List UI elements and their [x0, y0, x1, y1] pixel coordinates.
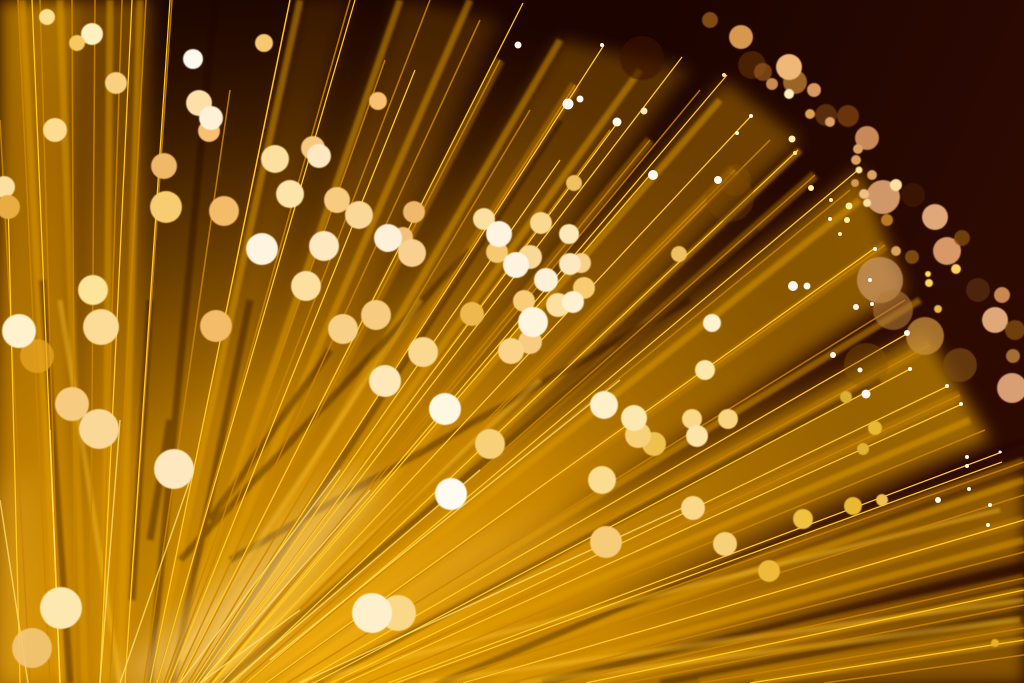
bokeh lights: large left and centre	[0, 9, 505, 668]
tiny white fibre tips	[514, 42, 1002, 527]
bokeh lights: upper right arc	[620, 12, 1024, 403]
cream fibre bundle near the base	[0, 480, 600, 683]
bokeh lights: central cluster	[460, 175, 999, 647]
